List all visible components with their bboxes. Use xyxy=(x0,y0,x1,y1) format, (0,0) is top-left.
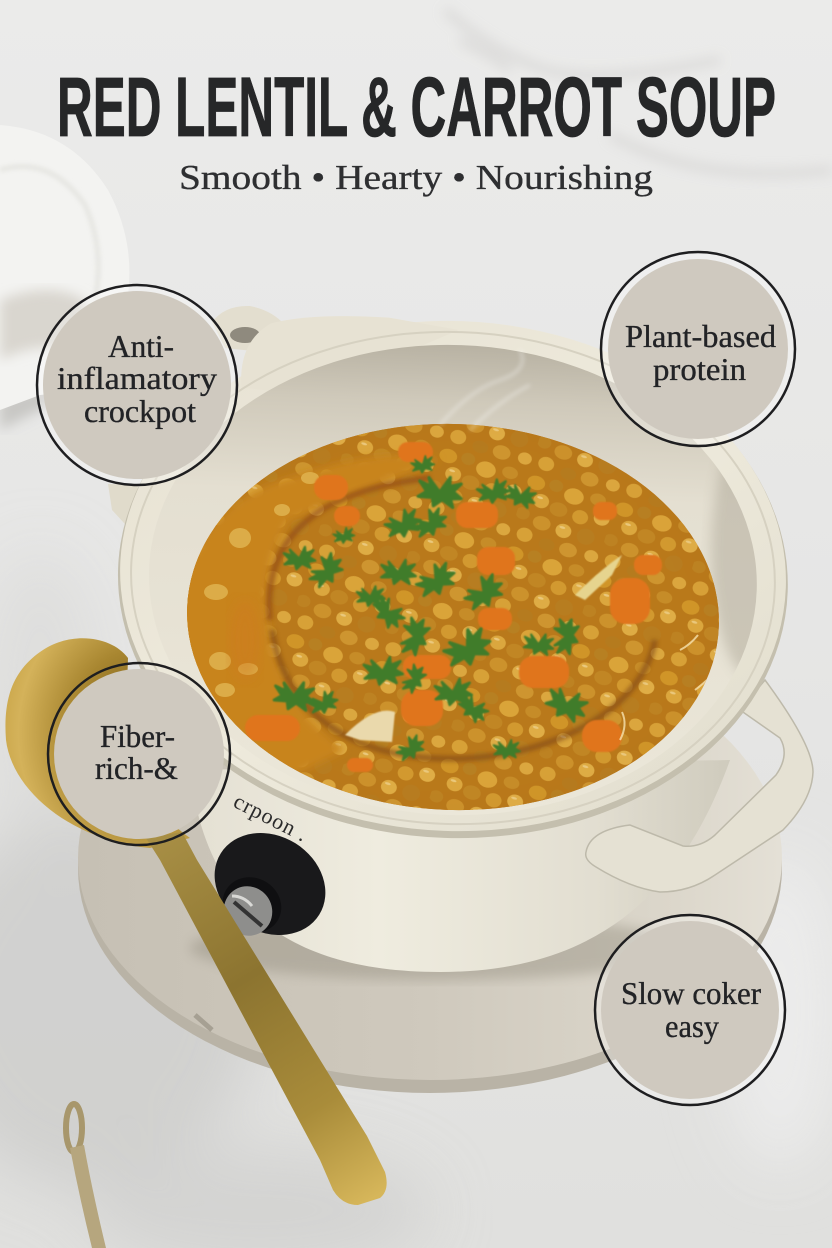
left lug xyxy=(108,484,138,535)
pot label text: crpoon . xyxy=(230,788,312,847)
badge: anti-inflammatory crockpot: crockpot xyxy=(84,393,196,429)
pale lentils in the broth xyxy=(204,472,319,697)
subtitle: Smooth • Hearty • Nourishing xyxy=(179,158,653,197)
spoon handle xyxy=(146,832,387,1205)
badge: plant-based protein xyxy=(601,252,795,446)
badge: fiber-rich: Fiber- xyxy=(100,718,175,754)
parsley xyxy=(270,456,592,763)
badge: fiber-rich xyxy=(48,663,230,845)
badge: anti-inflammatory crockpot xyxy=(37,285,237,485)
top lug xyxy=(212,306,282,352)
inner wall xyxy=(141,335,765,825)
stone board xyxy=(78,636,782,1093)
badge: plant-based protein: protein xyxy=(653,351,746,387)
swirl of oil xyxy=(269,478,430,620)
soup xyxy=(175,420,730,820)
rim xyxy=(109,308,819,850)
pot body xyxy=(190,760,730,972)
badge: fiber-rich: rich-& xyxy=(95,750,178,786)
badge: slow cooker easy xyxy=(595,915,785,1105)
gold spoon xyxy=(5,638,387,1205)
small spoon in the corner xyxy=(66,1104,106,1248)
carrots xyxy=(245,442,662,772)
right handle xyxy=(586,680,813,892)
badge: anti-inflammatory crockpot: Anti- xyxy=(108,328,174,364)
napkin xyxy=(0,125,129,430)
control knob xyxy=(195,813,345,955)
onions xyxy=(345,711,395,742)
badge: slow cooker easy: easy xyxy=(665,1008,719,1044)
badge: plant-based protein: Plant-based xyxy=(625,318,776,354)
spoon bowl xyxy=(5,638,190,848)
badge: slow cooker easy: Slow coker xyxy=(621,975,761,1011)
badge: anti-inflammatory crockpot: inflamatory xyxy=(57,360,217,396)
steam xyxy=(440,350,530,430)
smooth broth band xyxy=(175,455,440,780)
glossy highlights xyxy=(620,635,715,740)
crockpot xyxy=(108,306,819,980)
